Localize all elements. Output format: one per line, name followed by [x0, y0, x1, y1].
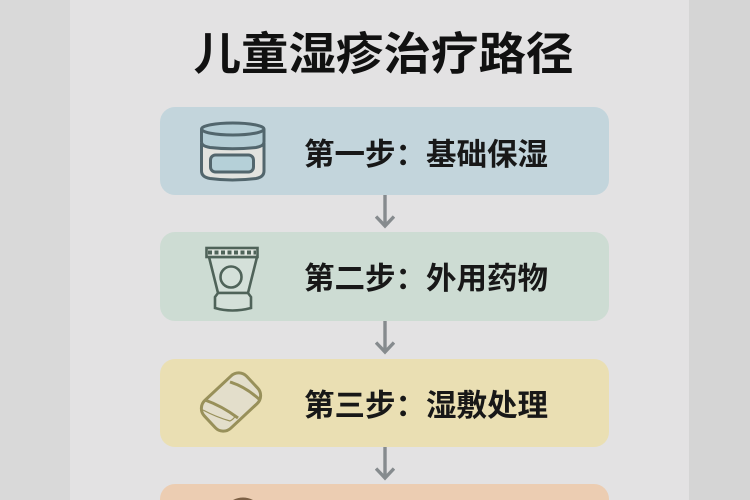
step 4 card: cropped at bottom [160, 484, 609, 500]
arrow 1 [375, 195, 395, 228]
step 1 label: 第一步：基础保湿 [304, 138, 548, 172]
step 3 card: wet compress [160, 359, 609, 447]
step 2 card: topical medication [160, 232, 609, 321]
arrow 2 [375, 321, 395, 354]
title: 儿童湿疹治疗路径 [194, 29, 574, 80]
icon: ointment tube [205, 246, 259, 312]
step 1 card: basic moisturising [160, 107, 609, 195]
icon: cream jar [200, 122, 266, 182]
icon: top of cropped icon [233, 498, 253, 500]
arrow 3 [375, 447, 395, 480]
step 3 label: 第三步：湿敷处理 [304, 389, 548, 423]
icon: compress pad [200, 371, 262, 433]
step 2 label: 第二步：外用药物 [304, 262, 548, 296]
